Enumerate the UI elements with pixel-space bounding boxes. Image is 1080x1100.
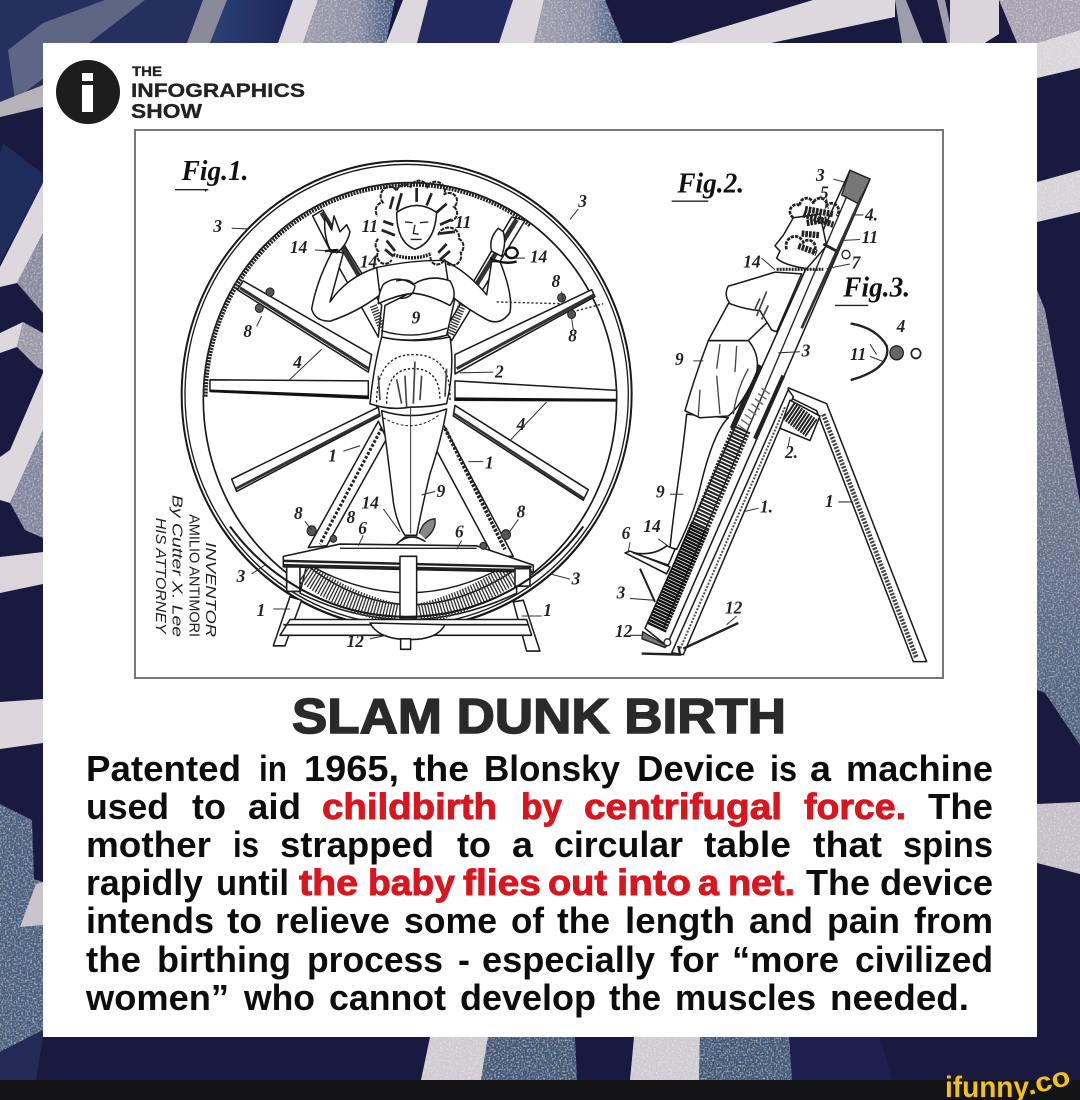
body text: centrifugal [584,786,782,827]
part number labels: 14 [362,492,379,512]
part number labels: Fig.3. [842,272,910,304]
part number labels: 11 [455,212,471,232]
body text: circular [554,824,683,865]
part number labels: 1 [257,600,265,620]
part number labels: 6 [455,521,464,542]
part number labels: 1 [328,445,337,466]
part number labels: 8 [568,325,577,346]
part number labels: 14 [290,236,307,257]
body text: baby [368,862,455,903]
body text: who [243,977,315,1018]
body text: 1965, [304,748,399,789]
stand rear leg [788,388,927,662]
body text: especially [482,939,655,980]
body text: a [512,824,534,865]
part number labels: 14 [743,251,761,272]
strap dotted line [497,302,603,311]
body text: into [617,862,691,903]
ifunny watermark [945,1061,1073,1100]
motor roller [780,400,820,441]
part number labels: 1. [760,496,773,517]
body text: used [86,786,169,827]
body text: the [609,977,661,1018]
body text: from [914,900,993,941]
foot rest [625,546,675,602]
body text: to [457,824,491,865]
part number labels: 8 [294,502,303,523]
part number labels: 3 [577,191,587,211]
body text: Blonsky [484,748,620,789]
logo: The Infographics Show [56,60,305,124]
part number labels: 9 [412,307,420,328]
body text: the [413,748,469,789]
body text: The [806,862,870,903]
wheel spokes [210,210,617,500]
part number labels: 4 [516,414,525,434]
body text: force. [804,786,906,827]
logo icon: i in circle [56,60,120,124]
body text: the [299,862,358,903]
part number labels: 1 [543,600,552,620]
part number labels [615,164,910,641]
part number labels: 6 [358,518,367,538]
part number labels: 8 [243,321,252,341]
base and brace [642,623,738,655]
base stand [273,597,540,651]
body text: a [810,748,832,789]
part number labels: 3 [236,566,245,586]
body text: develop [460,977,596,1018]
part number labels: 7 [852,252,861,273]
body text: that [813,824,882,865]
part number labels: 4 [896,315,905,336]
patent drawing frame [135,130,943,678]
body text: process [307,939,443,980]
figure 1: wheel with strapped woman, front view [152,155,632,651]
body text: Device [637,748,755,789]
body text: out [548,862,607,903]
woman figure [312,181,518,544]
logo wordmark: THE [132,63,162,79]
part number labels: 14 [360,251,377,272]
body text: machine [846,748,993,789]
body text: by [521,786,562,827]
part number labels: 3 [801,340,810,360]
body text: the [86,939,141,980]
part number labels: 2. [784,442,798,462]
body text: is [233,824,259,865]
body text [85,748,993,1018]
body text: length [625,900,735,941]
body text: pain [827,900,900,941]
body text: a [698,862,720,903]
part number labels: 12 [347,630,364,651]
figure 3 clamp [852,324,921,380]
part number labels: 3 [212,215,222,236]
part number labels: 11 [850,343,866,364]
body text: muscles [675,977,816,1018]
part number labels: 9 [656,481,665,502]
body text: birthing [157,939,291,980]
part number labels: 2 [494,361,504,381]
figures 2 and 3: side view of device and clamp [615,164,927,662]
part number labels: 3 [815,164,825,185]
body text: until [216,862,289,903]
body text: needed. [830,977,969,1018]
part number labels: 3 [616,582,625,603]
body text: rapidly [86,862,203,903]
wheel rim [182,161,632,628]
body text: civilized [855,939,993,980]
part number labels: 12 [615,621,632,641]
heading: SLAM DUNK BIRTH [292,690,786,744]
body text: cannot [329,977,446,1018]
part number labels: 3 [571,568,580,589]
part number labels: 9 [675,349,684,369]
body text: the [557,900,610,941]
stand front leg [672,390,793,655]
body text: device [880,862,993,903]
logo wordmark: SHOW [131,101,202,123]
part number labels [175,155,587,651]
logo wordmark [131,63,305,123]
body text: The [928,786,993,827]
part number labels: 8 [552,271,560,291]
body text: spins [903,824,993,865]
part number labels: 6 [622,522,630,543]
part number labels: 1 [825,491,834,511]
tilted table [283,544,533,620]
body text: childbirth [322,786,497,827]
body text: Patented [86,748,241,789]
part number labels: 14 [530,246,547,267]
inventor signature text: INVENTOR [202,542,219,637]
inventor signature text: AMILIO ANTIMORI [185,514,202,637]
body text: intends [86,900,214,941]
part number labels: 8 [347,507,355,527]
part number labels: 1 [485,452,494,473]
ifunny watermark: .co [1023,1061,1073,1100]
body text: flies [463,862,541,903]
woman in profile [670,198,850,549]
part number labels: Fig.2. [676,168,744,200]
part number labels: 14 [643,515,661,536]
part number labels: Fig.1. [181,155,248,187]
part number labels: 4. [864,204,878,225]
body text: “more [732,939,839,980]
part number labels: 9 [437,481,445,501]
tilted board [642,170,870,648]
body text: to [227,900,262,941]
inventor signature text [152,495,219,637]
body text: table [704,824,791,865]
body text: - [458,939,470,980]
body text: some [404,900,497,941]
body text: in [259,748,287,789]
part number labels: 5 [820,182,829,203]
table support legs [308,421,513,556]
part number labels: 4 [292,352,302,372]
body text: strapped [280,824,434,865]
body text: is [770,748,797,789]
body text: to [192,786,226,827]
body text: aid [248,786,301,827]
body text: mother [86,824,211,865]
part number labels: 12 [725,597,742,618]
body text: and [749,900,813,941]
bottom black bar [0,1080,1080,1100]
part number labels: 11 [862,227,878,247]
part number labels: 11 [362,215,378,236]
body text: net. [728,862,795,903]
body text: women” [85,977,229,1018]
wheel bottom rim over table [223,527,590,628]
bolts [255,288,576,549]
body text: of [511,900,545,941]
body text: relieve [275,900,390,941]
inventor signature text: By Cutter X. Lee [169,495,185,637]
body text: for [670,939,719,980]
logo wordmark: INFOGRAPHICS [131,80,305,102]
part number labels: 8 [517,501,525,522]
inventor signature text: HIS ATTORNEY [152,518,169,635]
